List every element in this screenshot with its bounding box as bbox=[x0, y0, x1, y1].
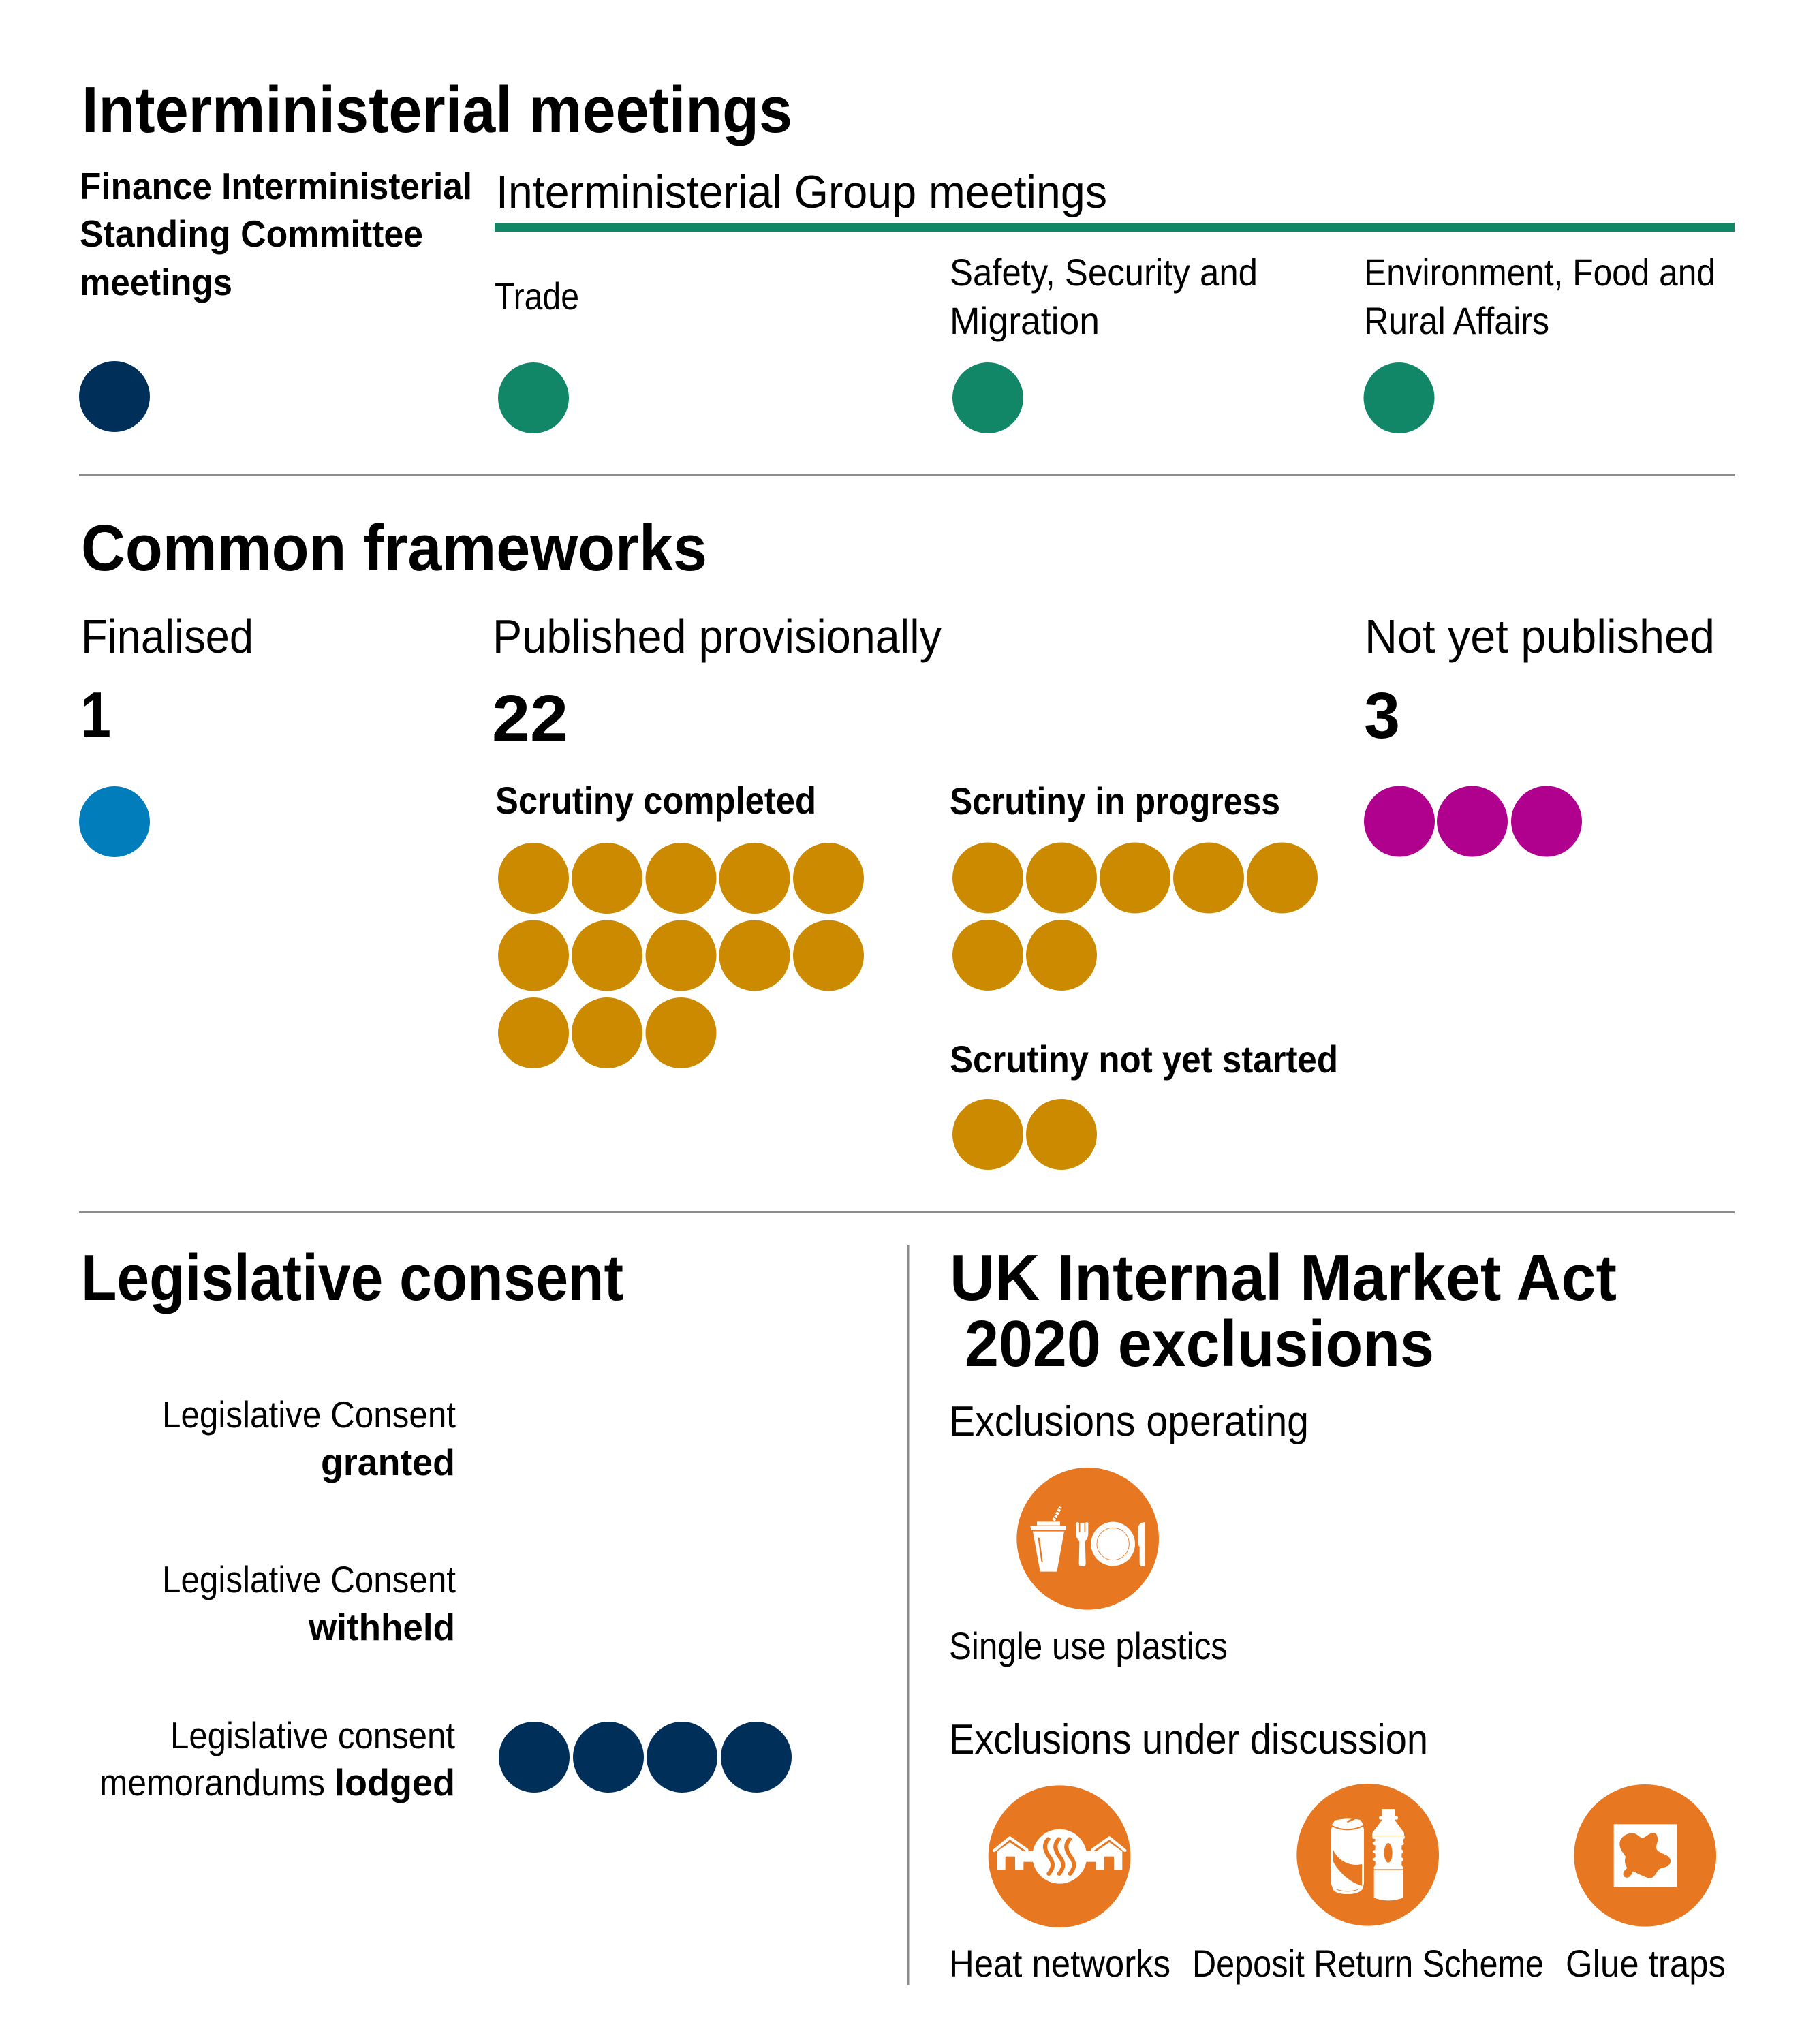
label: Legislative Consent withheld bbox=[162, 1558, 456, 1648]
label: Legislative Consent withheld: Legislative Consent bbox=[162, 1558, 456, 1600]
label: Environment, Food and Rural Affairs bbox=[1364, 251, 1715, 342]
label: Finalised: Finalised bbox=[81, 610, 253, 663]
panel: Common frameworks bbox=[79, 512, 1715, 1170]
text: Finance Interministerial Standing Committee meetings bbox=[80, 165, 472, 303]
label: Not yet published: Not yet published bbox=[1365, 610, 1715, 663]
number: 1: 1 bbox=[80, 679, 111, 752]
label: Legislative consent memorandums lodged bbox=[99, 1714, 455, 1803]
dot: finalised bbox=[79, 786, 150, 857]
label: Heat networks: Heat networks bbox=[949, 1942, 1170, 1985]
label: Safety, Security and Migration: Safety, Security and bbox=[950, 251, 1258, 294]
label: Environment, Food and Rural Affairs: Rural Affairs bbox=[1364, 299, 1549, 342]
icon: glue traps bbox=[1574, 1784, 1716, 1927]
text: Finance Interministerial Standing Committee meetings: Finance Interministerial bbox=[80, 165, 472, 207]
icon: deposit return scheme bbox=[1296, 1784, 1439, 1926]
dots: scrutiny not yet started bbox=[952, 1099, 1097, 1170]
dot: finance committee meeting bbox=[79, 361, 150, 432]
number: 3: 3 bbox=[1364, 679, 1400, 752]
green rule under group heading bbox=[495, 223, 1735, 232]
label: Legislative consent memorandums lodged: lodged bbox=[335, 1761, 455, 1803]
label: Published provisionally: Published provisionally bbox=[493, 610, 942, 663]
label: Safety, Security and Migration bbox=[950, 251, 1258, 342]
dots: memorandums lodged bbox=[499, 1722, 792, 1793]
label: Legislative consent memorandums lodged: memorandums bbox=[99, 1761, 325, 1803]
panel: Interministerial meetings bbox=[79, 74, 1735, 433]
subheading: Exclusions under discussion: Exclusions under discussion bbox=[949, 1716, 1428, 1763]
label: Legislative Consent withheld: withheld bbox=[308, 1606, 455, 1648]
heading: Interministerial meetings: Interministerial meetings bbox=[82, 74, 792, 146]
label: Legislative Consent granted: granted bbox=[321, 1441, 455, 1483]
number: 22: 22 bbox=[492, 682, 568, 755]
dot: environment meeting bbox=[1364, 362, 1435, 433]
heading: UK Internal Market Act 2020 exclusions: UK Internal Market Act bbox=[950, 1241, 1617, 1314]
subheading: Exclusions operating: Exclusions operating bbox=[949, 1398, 1309, 1445]
text: Finance Interministerial Standing Committee meetings: Standing Committee bbox=[80, 213, 423, 255]
subheading: Scrutiny completed: Scrutiny completed bbox=[495, 779, 816, 822]
panel: UK Internal Market Act 2020 exclusions bbox=[949, 1241, 1726, 1985]
subheading: Interministerial Group meetings: Interministerial Group meetings bbox=[496, 166, 1107, 218]
label: Single use plastics: Single use plastics bbox=[949, 1624, 1228, 1667]
text: Finance Interministerial Standing Committee meetings: meetings bbox=[80, 261, 232, 303]
dots: scrutiny completed bbox=[498, 843, 864, 1068]
label: Legislative Consent granted: Legislative Consent bbox=[162, 1393, 456, 1436]
panel: Legislative consent bbox=[81, 1241, 792, 1803]
label: Safety, Security and Migration: Migration bbox=[950, 299, 1100, 342]
dots: scrutiny in progress bbox=[952, 842, 1318, 991]
label: Environment, Food and Rural Affairs: Environment, Food and bbox=[1364, 251, 1715, 294]
label: Trade: Trade bbox=[495, 275, 579, 318]
heading: UK Internal Market Act 2020 exclusions bbox=[950, 1241, 1617, 1380]
heading: Common frameworks: Common frameworks bbox=[81, 512, 707, 585]
heading: Legislative consent: Legislative consent bbox=[81, 1241, 623, 1314]
label: Deposit Return Scheme: Deposit Return Scheme bbox=[1192, 1942, 1544, 1985]
heading: UK Internal Market Act 2020 exclusions: 2020 exclusions bbox=[965, 1307, 1434, 1380]
icon: single use plastics bbox=[1016, 1468, 1159, 1610]
dot: safety meeting bbox=[952, 362, 1023, 433]
label: Legislative consent memorandums lodged: Legislative consent bbox=[170, 1714, 455, 1756]
icon: heat networks bbox=[989, 1785, 1130, 1927]
subheading: Scrutiny in progress: Scrutiny in progress bbox=[950, 779, 1280, 822]
subheading: Scrutiny not yet started: Scrutiny not yet started bbox=[950, 1038, 1338, 1081]
label: Glue traps: Glue traps bbox=[1566, 1942, 1726, 1985]
dot: trade meeting bbox=[498, 362, 569, 433]
dots: not yet published bbox=[1364, 786, 1582, 857]
label: Legislative Consent granted bbox=[162, 1393, 456, 1483]
